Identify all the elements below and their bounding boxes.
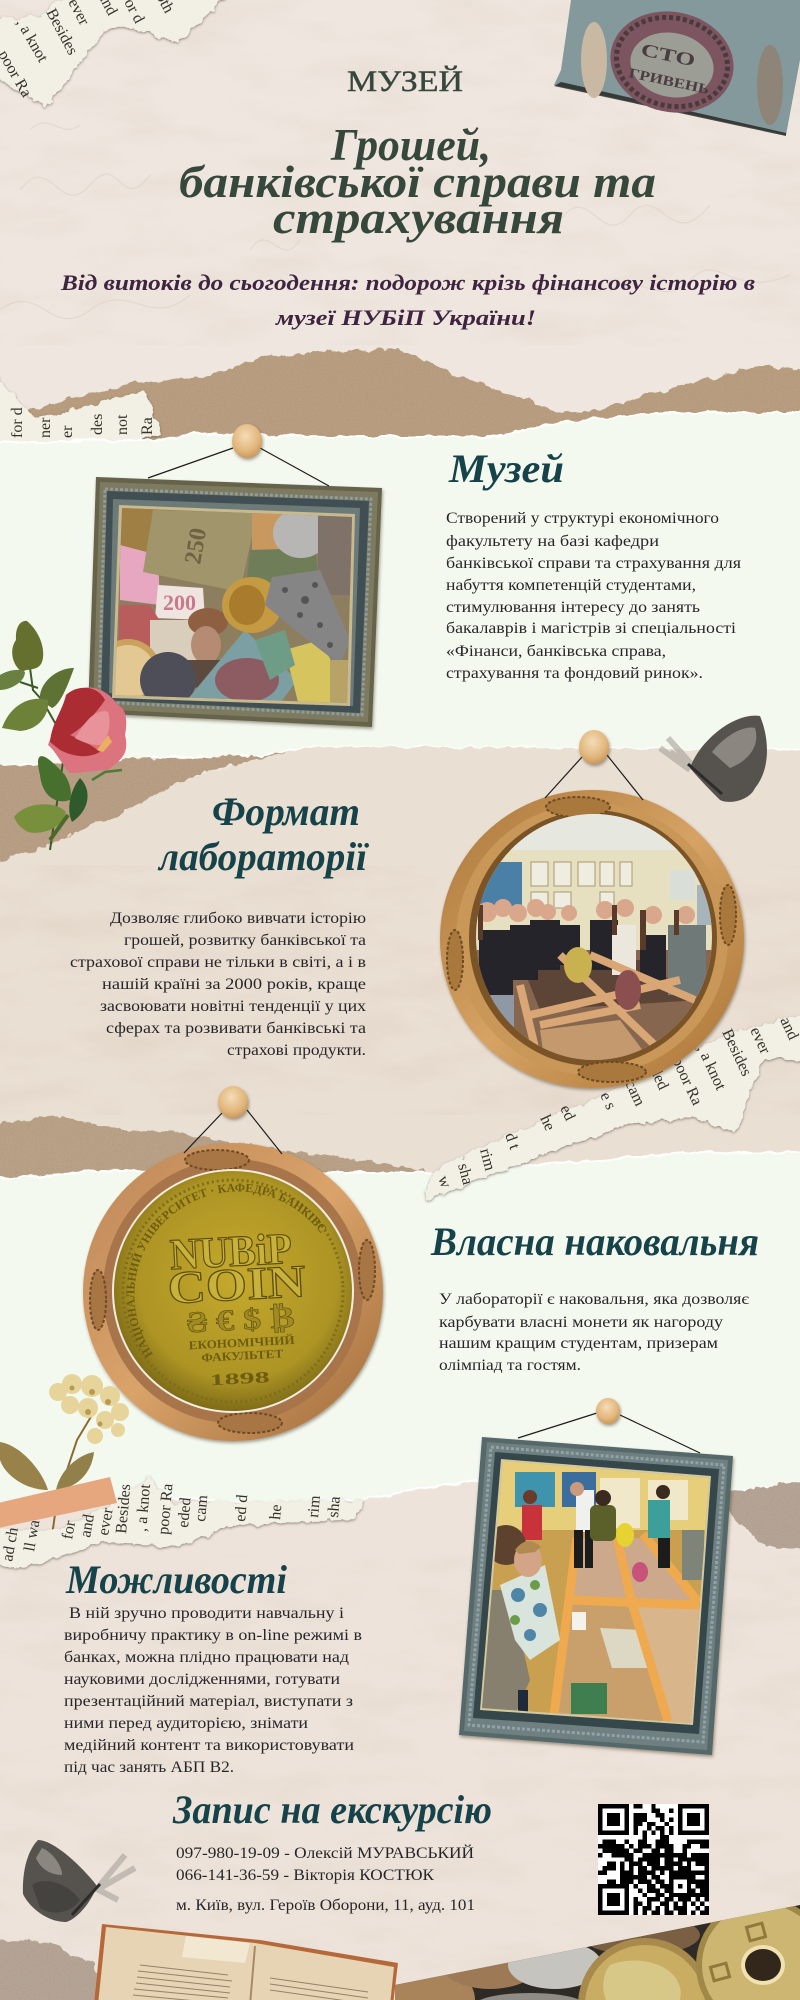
faint handwriting texture bbox=[0, 123, 790, 319]
text block: laboratory format: страхові продукти. bbox=[227, 1042, 366, 1059]
contacts bbox=[176, 1843, 475, 1914]
heading: Формат лабораторії bbox=[157, 789, 370, 879]
scrap: newspaper strip middle right: he bbox=[536, 1113, 558, 1133]
scrap: newspaper bottom-left of header: not bbox=[114, 414, 131, 435]
subtitle: Від витоків до сьогодення: подорож крізь фінансову історію в bbox=[60, 270, 755, 295]
text block: museum: «Фінанси, банківська справа, bbox=[446, 643, 666, 660]
scrap: newspaper strip middle right: ed bbox=[556, 1103, 578, 1123]
text block: laboratory format: сферах та розвивати банківські та bbox=[106, 1020, 366, 1037]
scrap: newspaper bottom-left of header: er bbox=[59, 425, 76, 438]
heading: Формат лабораторії: Формат bbox=[212, 789, 360, 834]
scrap: newspaper strip lower left: ever bbox=[95, 1506, 117, 1537]
text block: museum: набуття компетенцій студентами, bbox=[446, 577, 696, 594]
hanging pin and strings: frame four bbox=[518, 1398, 700, 1453]
scrap: newspaper top left: , a knot bbox=[13, 16, 51, 66]
scrap: newspaper bottom-left of header bbox=[0, 373, 161, 448]
text block: laboratory format bbox=[70, 910, 367, 1059]
scrap: newspaper strip middle right: poor Ra bbox=[668, 1055, 705, 1108]
text block: museum: страхування та фондовий ринок». bbox=[446, 665, 703, 682]
text block: museum bbox=[446, 510, 742, 682]
gold coin NUBiP: NUBiP bbox=[169, 1224, 293, 1279]
gilt oval frame bbox=[440, 790, 744, 1088]
scrap: newspaper strip lower left: cam bbox=[192, 1494, 211, 1522]
kraft paper strip under first section bbox=[0, 349, 800, 460]
tape bbox=[0, 1477, 117, 1528]
heading: Запис на екскурсію: Запис на екскурсію bbox=[172, 1787, 492, 1832]
text block: museum: бакалаврів і магістрів зі спеціальності bbox=[446, 620, 737, 637]
main title: страхування bbox=[273, 192, 564, 243]
text block: anvil: олімпіад та гостям. bbox=[439, 1357, 581, 1374]
open book bbox=[94, 1924, 398, 2000]
text block: anvil: карбувати власні монети як нагороду bbox=[439, 1314, 723, 1331]
hanging pin and strings: frame two bbox=[545, 730, 643, 800]
scrap: newspaper bottom-left of header: for d bbox=[9, 407, 26, 438]
oval frame: minted coin bbox=[82, 1143, 386, 1446]
text block: anvil: У лабораторії є наковальня, яка дозволяє bbox=[439, 1291, 749, 1308]
scrap: newspaper strip lower left: sha bbox=[325, 1496, 344, 1518]
text block: possibilities: під час занять АБП В2. bbox=[64, 1759, 234, 1776]
text block: laboratory format: грошей, розвитку банківської та bbox=[124, 932, 366, 949]
text block: museum: факультету на базі кафедри bbox=[446, 533, 660, 550]
kraft scrap right bbox=[730, 1480, 800, 1548]
text block: museum: стимулювання інтересу до занять bbox=[446, 599, 700, 616]
text block: anvil bbox=[439, 1291, 749, 1374]
text block: laboratory format: Дозволяє глибоко вивчати історію bbox=[110, 910, 366, 927]
scrap: newspaper strip middle right: w bbox=[434, 1174, 454, 1191]
framed picture: exhibition visit bbox=[459, 1437, 733, 1755]
framed picture: money collage bbox=[88, 477, 382, 727]
picture frame one bbox=[88, 477, 382, 727]
title small: МУЗЕЙ: МУЗЕЙ bbox=[347, 65, 463, 98]
panel: mint paper section one bbox=[0, 413, 800, 767]
copper oval frame bbox=[83, 1143, 383, 1441]
text block: possibilities: медійний контент та використовувати bbox=[64, 1737, 354, 1754]
icon: rose bbox=[0, 621, 126, 850]
hanging pin and strings: frame three bbox=[184, 1086, 282, 1154]
text block: possibilities bbox=[64, 1605, 362, 1776]
QR code bbox=[598, 1804, 709, 1915]
gold coin NUBiP: ЕКОНОМІЧНИЙ bbox=[188, 1333, 296, 1352]
heading: Можливості: Можливості bbox=[65, 1557, 287, 1602]
scrap: newspaper strip lower left: ed d bbox=[232, 1494, 251, 1522]
scrap: newspaper strip lower left: Besides bbox=[113, 1483, 134, 1534]
scrap: newspaper strip middle right bbox=[423, 1015, 800, 1200]
scrap: newspaper strip lower left: eded bbox=[175, 1497, 195, 1528]
scrap: newspaper bottom-left of header: ner bbox=[37, 417, 54, 438]
collage photo bbox=[115, 508, 352, 703]
scrap: newspaper strip middle right: rim bbox=[476, 1147, 498, 1173]
subtitle: музеї НУБіП України! bbox=[275, 305, 536, 330]
contacts: 097-980-19-09 - Олексій МУРАВСЬКИЙ bbox=[176, 1843, 474, 1862]
scrap: newspaper strip lower left: he bbox=[267, 1504, 285, 1520]
scrap: newspaper strip lower left bbox=[0, 1477, 365, 1570]
panel: beige paper section four bbox=[0, 1482, 800, 2000]
text block: museum: банківської справи та страхування для bbox=[446, 555, 742, 572]
contacts: м. Київ, вул. Героїв Оборони, 11, ауд. 101 bbox=[176, 1897, 475, 1914]
oval mirror frame: students photo bbox=[440, 790, 744, 1088]
main title bbox=[179, 119, 656, 243]
hanging pin and strings: frame one bbox=[148, 424, 329, 486]
collage photo: 250 bbox=[180, 526, 212, 566]
scrap: newspaper strip lower left: for bbox=[59, 1519, 79, 1541]
scrap: newspaper top left bbox=[0, 0, 228, 107]
heading: Власна наковальня: Власна наковальня bbox=[430, 1219, 759, 1264]
scrap: newspaper top left: Besides bbox=[42, 6, 81, 58]
main title: банківської справи та bbox=[179, 156, 656, 207]
scrap: newspaper strip middle right: cam bbox=[621, 1078, 648, 1109]
scrap: newspaper strip lower left: ll wa bbox=[21, 1519, 43, 1553]
scrap: newspaper strip middle right: d t bbox=[501, 1131, 523, 1152]
scrap: newspaper strip middle right: ded bbox=[646, 1065, 672, 1093]
gold coin NUBiP: ₴ € $ ₿ bbox=[186, 1301, 295, 1339]
subtitle bbox=[60, 270, 755, 330]
scrap: newspaper strip lower left: poor Ra bbox=[155, 1483, 176, 1535]
paper vein texture: section four bbox=[0, 1555, 800, 2000]
text block: possibilities: ними перед аудиторією, знімати bbox=[64, 1715, 308, 1732]
text block: anvil: нашим кращим студентам, призерам bbox=[439, 1335, 718, 1352]
exhibition photo bbox=[478, 1455, 718, 1730]
picture frame four bbox=[459, 1437, 733, 1755]
banknote: top right bbox=[554, 0, 800, 136]
scrap: newspaper strip middle right: Besides bbox=[718, 1027, 755, 1079]
gold coin NUBiP: ФАКУЛЬТЕТ bbox=[201, 1346, 284, 1365]
banknote: top right: СТО bbox=[639, 39, 697, 70]
scrap: newspaper strip middle right: ever bbox=[746, 1025, 774, 1057]
text block: laboratory format: засвоювати новітні тенденції у цих bbox=[100, 998, 366, 1015]
scrap: newspaper strip lower left: rim bbox=[305, 1494, 324, 1518]
text block: possibilities: презентаційний матеріал, виступати з bbox=[64, 1693, 353, 1710]
dried flower bbox=[0, 1374, 129, 1550]
icon: butterfly two bbox=[23, 1840, 135, 1922]
text block: possibilities: науковими дослідженнями, готувати bbox=[64, 1671, 340, 1688]
heading: Формат лабораторії: лабораторії bbox=[157, 834, 370, 879]
paper vein texture: section two bbox=[0, 865, 800, 1115]
text block: laboratory format: страхової справи не тільки в світі, а і в bbox=[70, 954, 367, 971]
panel: mint paper section three bbox=[0, 1152, 800, 1525]
panel: beige paper section two bbox=[0, 747, 800, 1180]
gold coin NUBiP bbox=[114, 1171, 352, 1411]
main title: Грошей, bbox=[330, 119, 491, 170]
scrap: newspaper bottom-left of header: Ra bbox=[139, 417, 156, 435]
text block: laboratory format: нашій країні за 2000 років, краще bbox=[102, 976, 366, 993]
text block: possibilities: виробничу практику в on-line режимі в bbox=[64, 1627, 362, 1644]
kraft paper strip between beige and mint bbox=[0, 1115, 430, 1195]
scrap: newspaper strip middle right: sha bbox=[454, 1162, 476, 1187]
icon: butterfly one bbox=[660, 716, 767, 802]
group photo bbox=[470, 810, 720, 1065]
scrap: newspaper strip lower left: , a knot bbox=[133, 1483, 154, 1532]
scrap: newspaper strip lower left: and bbox=[77, 1513, 98, 1539]
contacts: 066-141-36-59 - Вікторія КОСТЮК bbox=[176, 1867, 434, 1884]
scrap: newspaper bottom-left of header: des bbox=[89, 414, 106, 435]
scrap: newspaper strip middle right: e s bbox=[596, 1090, 619, 1112]
text block: possibilities: банках, можна плідно працювати над bbox=[64, 1649, 349, 1666]
collage photo: 200 bbox=[163, 590, 196, 615]
scrap: newspaper strip middle right: , a knot bbox=[693, 1043, 729, 1093]
paper vein texture: header bbox=[0, 0, 800, 345]
gold coin NUBiP: 1898 bbox=[209, 1369, 270, 1389]
coins pile bottom right bbox=[385, 1898, 800, 2000]
gold coin NUBiP: COIN bbox=[166, 1255, 307, 1313]
heading: Музей: Музей bbox=[448, 446, 564, 491]
kraft scrap bottom left bbox=[0, 1940, 110, 2000]
banknote: top right: ГРИВЕНЬ bbox=[627, 66, 710, 98]
text block: possibilities: В ній зручно проводити навчальну і bbox=[69, 1605, 345, 1622]
text block: museum: Створений у структурі економічного bbox=[446, 510, 719, 527]
